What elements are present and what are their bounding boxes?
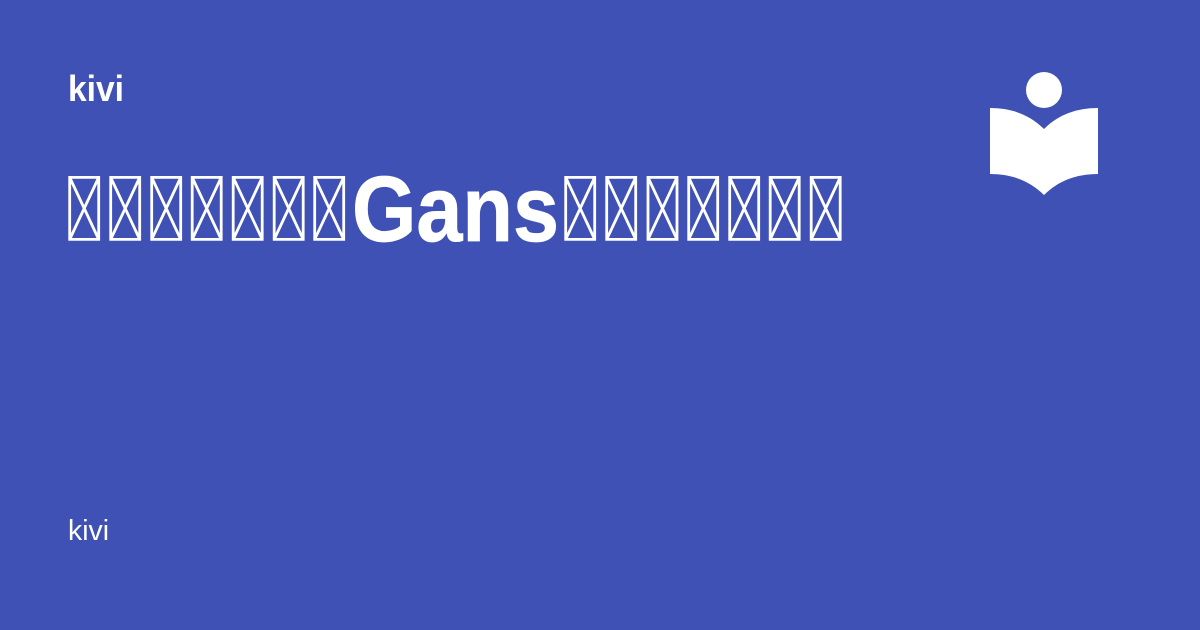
title latin text: Gans	[352, 157, 559, 261]
brand name heading: kivi	[68, 68, 124, 109]
missing glyph boxes before Gans	[70, 177, 344, 239]
missing glyph boxes after Gans	[566, 177, 840, 239]
icon: person reading open book	[990, 72, 1098, 195]
footer site name: kivi	[68, 515, 109, 547]
title with missing-glyph boxes	[70, 157, 840, 261]
